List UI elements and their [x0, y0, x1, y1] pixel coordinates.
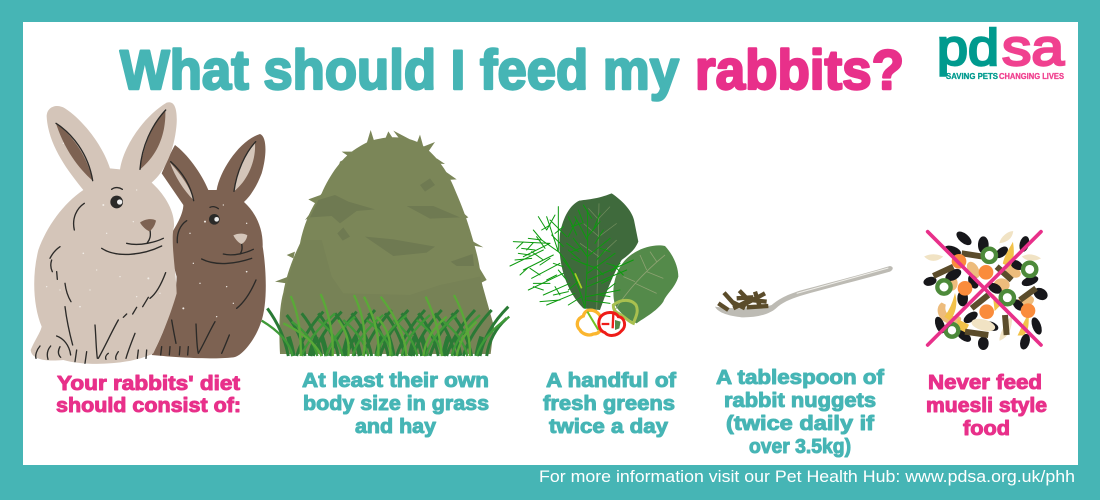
caption: nuggets: A tablespoon of [716, 367, 884, 389]
caption: greens: A handful of [546, 370, 676, 392]
logo: pdsa [937, 19, 1065, 81]
caption: grass and hay: and hay [355, 416, 437, 438]
illustration: two rabbits [31, 102, 266, 364]
caption: diet intro [56, 373, 241, 417]
orange pieces [952, 254, 1035, 319]
grass light blades [283, 294, 477, 356]
seeds [923, 230, 1049, 350]
light leaf [613, 245, 678, 323]
logo: pdsa: SAVING PETS [946, 71, 998, 81]
footer: more information: For more information visit our Pet Health Hub: www.pdsa.org.uk/phh [539, 468, 1075, 486]
cream rabbit [31, 102, 177, 364]
caption: nuggets [716, 367, 884, 458]
grass mid blades [262, 313, 509, 356]
caption: muesli warning: food [963, 418, 1010, 440]
yellow pepper ring [577, 310, 602, 335]
logo: pdsa: pd [937, 19, 999, 76]
hay tufts [310, 178, 474, 266]
caption: muesli warning [926, 372, 1047, 440]
caption: grass and hay: At least their own [302, 370, 489, 392]
brown rabbit [152, 134, 266, 358]
illustration: hay pile with grass [262, 130, 509, 356]
illustration: muesli with cross [923, 230, 1049, 350]
brown sticks [933, 253, 1036, 335]
caption: grass and hay: body size in grass [303, 393, 489, 415]
caption: nuggets: (twice daily if [726, 413, 874, 435]
illustration: spoon of nuggets [715, 266, 893, 317]
nuggets [718, 291, 768, 310]
illustration: leafy greens and dill [510, 193, 678, 335]
caption: muesli warning: Never feed [928, 372, 1042, 394]
hay pile [279, 137, 494, 354]
dark leaf [559, 193, 638, 310]
title: rabbits? [695, 38, 904, 101]
caption: greens: fresh greens [543, 393, 675, 415]
caption: diet intro: Your rabbits' diet [57, 373, 240, 395]
grass dark blades [267, 307, 508, 356]
hay wisps [275, 130, 487, 283]
red pepper ring [599, 313, 625, 335]
pale pieces [925, 232, 1040, 340]
tan pieces [938, 260, 1035, 323]
dill fronds [510, 205, 633, 308]
fur speckles [46, 143, 247, 317]
pale green pepper ring [613, 300, 637, 323]
yellow pieces [945, 243, 1028, 335]
caption: grass and hay [302, 370, 489, 438]
caption: nuggets: rabbit nuggets [724, 390, 876, 412]
caption: nuggets: over 3.5kg) [749, 436, 851, 458]
title: What should I feed my [120, 38, 679, 101]
caption: greens [543, 370, 676, 438]
spoon [715, 266, 893, 317]
caption: diet intro: should consist of: [56, 395, 241, 417]
caption: greens: twice a day [549, 416, 669, 438]
logo: pdsa: sa [1002, 19, 1065, 76]
caption: muesli warning: muesli style [926, 395, 1047, 417]
cross [928, 232, 1041, 345]
green rings [937, 249, 1036, 337]
hay lower shading [280, 240, 494, 353]
logo: pdsa: CHANGING LIVES [999, 71, 1064, 81]
